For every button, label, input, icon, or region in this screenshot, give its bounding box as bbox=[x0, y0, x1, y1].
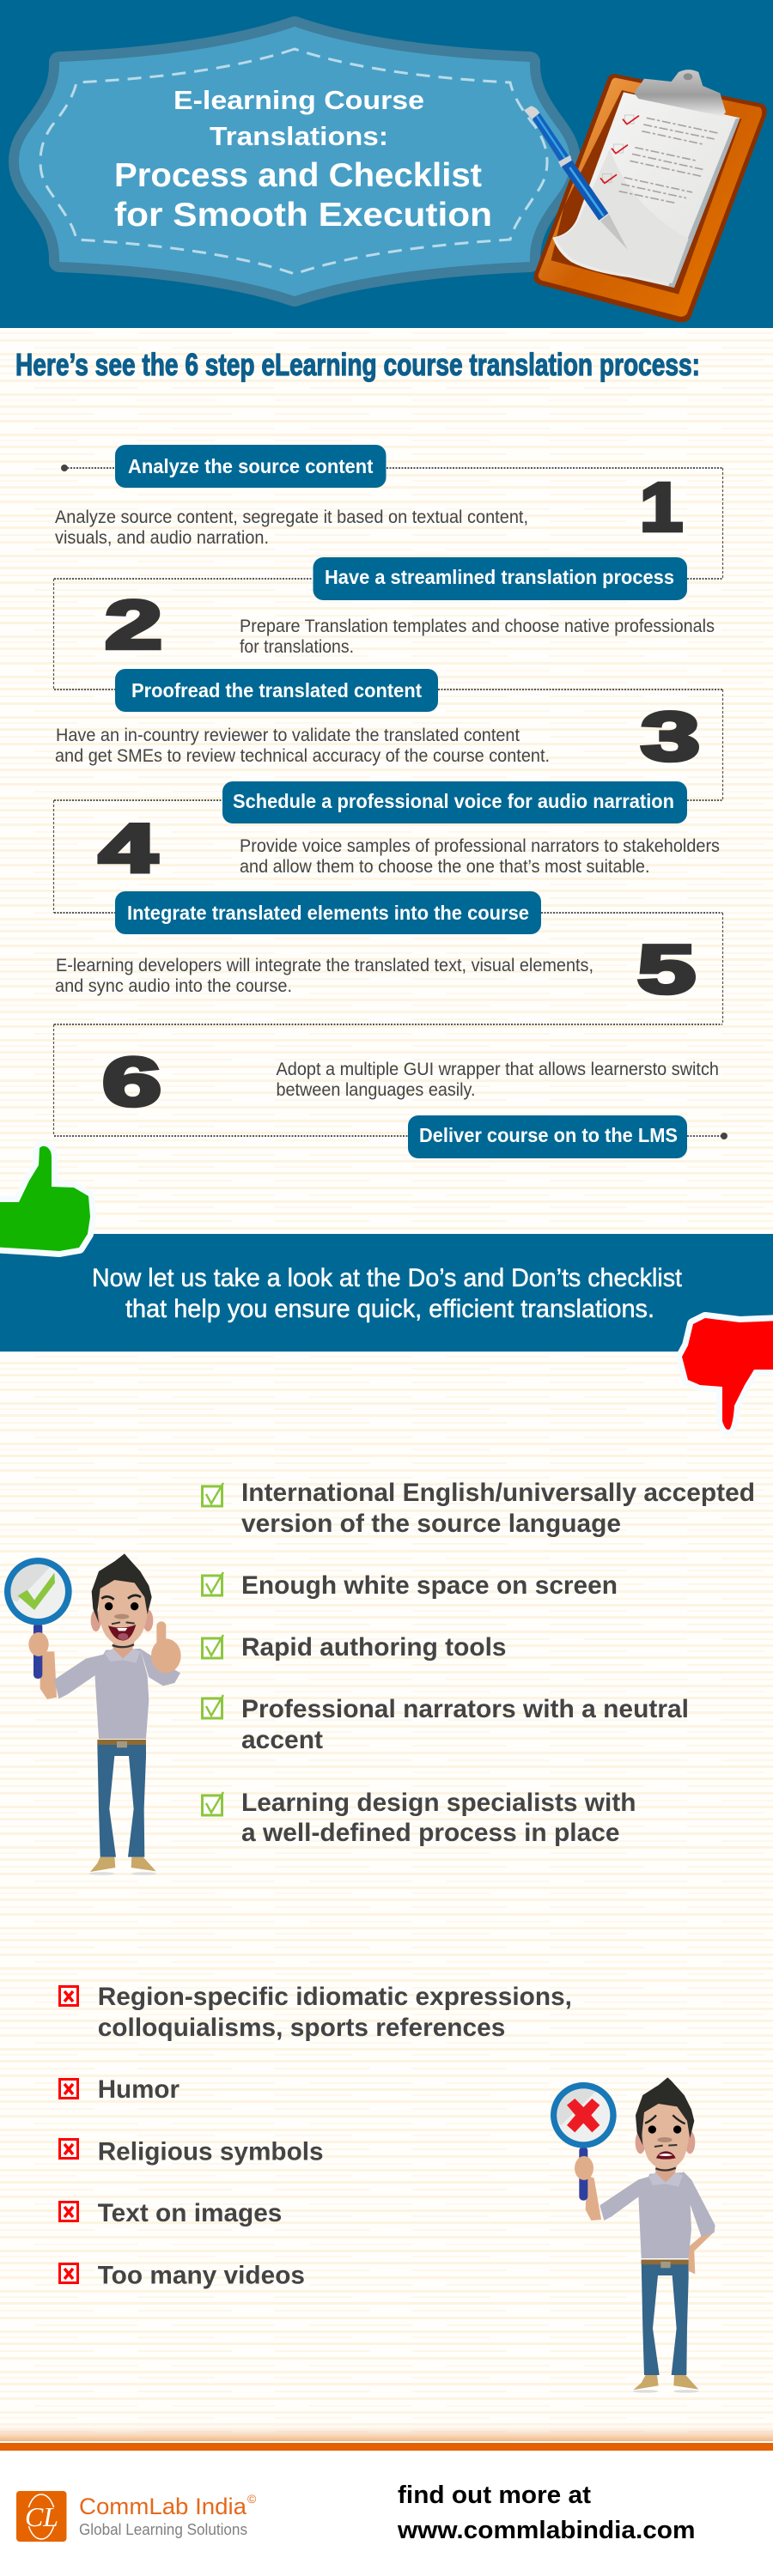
step 3 description: Have an in-country reviewer to validate the translated content bbox=[56, 726, 520, 745]
title text bbox=[114, 85, 492, 234]
do item 4: Professional narrators with a neutral bbox=[241, 1695, 689, 1723]
do's checklist bbox=[203, 1479, 755, 1847]
don't item 1: Region-specific idiomatic expressions, bbox=[98, 1983, 572, 2011]
don't item 2 bbox=[60, 2075, 180, 2104]
don't item 5: Too many videos bbox=[98, 2262, 305, 2289]
step 5 description: E-learning developers will integrate the translated text, visual elements, bbox=[56, 956, 593, 975]
process path connector bbox=[53, 465, 727, 1139]
do item 2: Enough white space on screen bbox=[241, 1571, 618, 1600]
step 5 heading pill: Integrate translated elements into the course bbox=[127, 902, 529, 924]
do item 4: accent bbox=[241, 1726, 323, 1754]
CommLab India logo: Global Learning Solutions bbox=[79, 2521, 247, 2538]
step 2 number: 2 bbox=[105, 586, 162, 663]
don't item 4: Text on images bbox=[98, 2199, 282, 2227]
title text: Translations: bbox=[210, 121, 388, 151]
step 5 description bbox=[55, 956, 593, 996]
footer link text: find out more at bbox=[398, 2482, 591, 2509]
step 6 heading pill bbox=[408, 1115, 687, 1158]
step 5 heading pill bbox=[115, 891, 541, 934]
step 3 heading pill: Proofread the translated content bbox=[131, 679, 422, 702]
don't item 1 bbox=[60, 1983, 572, 2042]
header banner bbox=[0, 0, 773, 328]
step 4 heading pill bbox=[222, 781, 687, 823]
don't item 1: colloquialisms, sports references bbox=[98, 2014, 505, 2042]
CommLab India logo: CommLab India bbox=[79, 2494, 247, 2519]
step 4 heading pill: Schedule a professional voice for audio narration bbox=[233, 790, 674, 812]
footer divider bbox=[0, 2426, 773, 2576]
step 6 heading pill: Deliver course on to the LMS bbox=[419, 1124, 678, 1146]
title badge bbox=[19, 27, 570, 296]
step 1 number: 1 bbox=[640, 469, 683, 545]
step 4 description: Provide voice samples of professional narrators to stakeholders bbox=[240, 836, 720, 856]
step 5 bbox=[55, 891, 696, 1007]
step 1 description: visuals, and audio narration. bbox=[55, 528, 269, 548]
step 3 number: 3 bbox=[641, 698, 700, 775]
don't item 3: Religious symbols bbox=[98, 2138, 324, 2166]
do item 5: Learning design specialists with bbox=[241, 1789, 636, 1817]
step 2 bbox=[105, 557, 715, 663]
sign with cross bbox=[551, 2082, 617, 2201]
step 2 description: Prepare Translation templates and choose native professionals bbox=[240, 617, 715, 636]
step 6 number: 6 bbox=[102, 1043, 161, 1120]
CommLab India logo bbox=[16, 2491, 257, 2542]
step 3 heading pill bbox=[115, 669, 438, 712]
step 3 description bbox=[55, 726, 550, 766]
logo mark: CL bbox=[25, 2501, 58, 2532]
icon: pen bbox=[524, 106, 628, 250]
do item 1: International English/universally accepted bbox=[241, 1479, 755, 1507]
sign with check bbox=[4, 1558, 72, 1679]
step 2 heading pill bbox=[313, 557, 687, 600]
step 6 description: between languages easily. bbox=[277, 1080, 476, 1100]
character: worried man with cross sign bbox=[551, 2077, 715, 2393]
step 3 bbox=[55, 669, 700, 775]
title text: Process and Checklist bbox=[114, 157, 482, 194]
title text: for Smooth Execution bbox=[114, 197, 492, 234]
don'ts checklist bbox=[60, 1983, 572, 2289]
CommLab India logo: © bbox=[247, 2492, 257, 2506]
step 1 heading pill: Analyze the source content bbox=[128, 455, 374, 477]
do item 5: a well-defined process in place bbox=[241, 1819, 620, 1847]
footer link text bbox=[397, 2482, 696, 2544]
step 6 bbox=[102, 1043, 719, 1158]
do item 3: Rapid authoring tools bbox=[241, 1633, 507, 1662]
step 5 description: and sync audio into the course. bbox=[55, 976, 292, 996]
step 2 description bbox=[240, 617, 715, 657]
step 3 description: and get SMEs to review technical accuracy of the course content. bbox=[55, 746, 550, 766]
step 1 description: Analyze source content, segregate it based on textual content, bbox=[55, 507, 528, 527]
step 4 number: 4 bbox=[99, 810, 158, 886]
do item 4 bbox=[203, 1695, 689, 1754]
character: happy man with check sign bbox=[4, 1553, 181, 1875]
icon: thumbs down bbox=[682, 1318, 773, 1430]
icon: clipboard with pen bbox=[524, 70, 767, 322]
footer link text: www.commlabindia.com bbox=[397, 2517, 696, 2544]
step 5 number: 5 bbox=[637, 931, 696, 1007]
checklist banner bbox=[0, 1234, 773, 1352]
checklist banner: that help you ensure quick, efficient translations. bbox=[125, 1295, 654, 1323]
logo mark bbox=[16, 2491, 67, 2542]
step 2 description: for translations. bbox=[240, 637, 354, 657]
checklist banner: Now let us take a look at the Do’s and Don’ts checklist bbox=[92, 1264, 683, 1292]
do item 1: version of the source language bbox=[241, 1510, 621, 1538]
step 1 heading pill bbox=[115, 445, 386, 488]
title text: E-learning Course bbox=[173, 85, 424, 115]
step 6 description: Adopt a multiple GUI wrapper that allows learnersto switch bbox=[277, 1060, 719, 1079]
step 4 description bbox=[240, 836, 720, 877]
icon: thumbs up bbox=[0, 1146, 90, 1251]
don't item 2: Humor bbox=[98, 2075, 180, 2104]
step 4 description: and allow them to choose the one that’s most suitable. bbox=[240, 857, 649, 877]
step 1 description bbox=[55, 507, 528, 548]
step 1 bbox=[55, 445, 683, 548]
do item 1 bbox=[203, 1479, 755, 1538]
do item 5 bbox=[203, 1789, 636, 1847]
step 2 heading pill: Have a streamlined translation process bbox=[325, 566, 674, 588]
step 4 bbox=[99, 781, 720, 886]
step 6 description bbox=[277, 1060, 719, 1100]
